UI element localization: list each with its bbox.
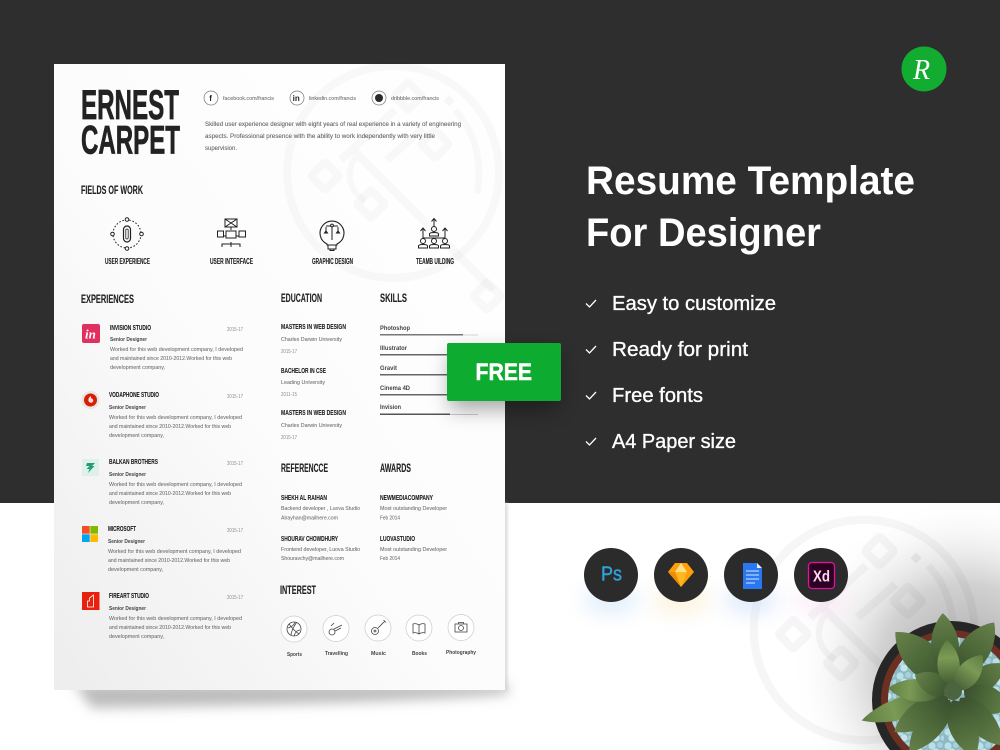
section: interest [280,583,477,658]
icon: sketch [653,548,709,614]
logo: green R badge: R [912,55,930,86]
section: education: 2015-17 [281,349,297,355]
summary paragraph: aspects. Professional presence with the ability to work independently with very little [205,133,435,140]
entry: microsoft [82,524,243,573]
name heading [81,81,180,162]
entry: fireart studio: Worked for this web development company, I developed [109,616,242,622]
summary paragraph: Skilled user experience designer with eight years of real experience in a variety of engineering [205,121,461,128]
software icons [583,548,849,614]
icon: photography [448,614,474,640]
background: white lower band [0,503,1000,750]
section: awards: Most outstanding Developer [380,506,447,512]
entry: vodaphone studio [82,390,243,439]
entry: balkan brothers: Worked for this web development company, I developed [109,482,242,488]
item: easy to customize: Easy to customize [612,293,776,315]
label: team building: TEAMB UILDING [416,257,454,266]
section: education: EDUCATION [281,291,322,305]
logo: balkan brothers [82,459,99,476]
section: education: Charles Darwin University [281,423,342,429]
icon: photoshop [583,548,639,614]
section: reference [281,461,360,562]
entry: microsoft: MICROSOFT [108,524,136,533]
icon: sports [281,616,307,642]
label: user interface: USER INTERFACE [210,257,253,266]
title: For Designer [586,211,821,255]
section: awards: LUOVASTUDIO [380,534,415,543]
entry: balkan brothers: 2015-17 [227,461,243,467]
section: education: MASTERS IN WEB DESIGN [281,408,346,417]
section: interest: Photography [446,650,477,656]
entry: fireart studio [82,591,243,640]
section: education: MASTERS IN WEB DESIGN [281,322,346,331]
entry: microsoft: Worked for this web development company, I developed [108,549,241,555]
section: reference: REFERENCCE [281,461,328,475]
logo: green R badge [902,46,946,92]
heading: fields of work: FIELDS OF WORK [81,185,143,197]
section: interest: Music [371,651,386,657]
social links [204,91,439,105]
badge: free [447,343,561,410]
facebook link: facebook.com/francis [223,96,274,102]
icon: google docs [723,548,779,614]
logo: fireart [82,592,100,610]
section: education: Charles Darwin University [281,337,342,343]
entry: microsoft: Senior Designer [108,539,146,545]
section: education: Leading University [281,380,325,386]
plant soft shadow [760,503,1000,750]
entry: balkan brothers [82,457,243,506]
icon: facebook [204,91,218,105]
icon: linkedin [290,91,304,105]
plant in pot [858,612,1000,750]
background: dark top band [0,0,1000,503]
section: reference: Backend developer , Luova Studio [281,506,360,512]
entry: vodaphone studio: Worked for this web development company, I developed [109,415,242,421]
section: awards: Feb 2014 [380,516,401,522]
entry: invision studio: development company, [110,365,165,371]
entry: balkan brothers: BALKAN BROTHERS [109,457,158,466]
summary paragraph [205,121,461,152]
paper drop shadow [74,503,508,708]
logo: vodafone [82,391,100,409]
title: Resume Template [586,159,915,203]
icon: adobe xd: Xd [813,568,830,586]
feature checklist [586,293,776,453]
skill bar: gravit: Gravit [380,366,397,372]
section: interest: Sports [287,652,302,658]
section: awards: NEWMEDIACOMPANY [380,493,433,502]
entry: balkan brothers: Senior Designer [109,472,147,478]
section: awards: Feb 2014 [380,556,401,562]
section: interest: Travelling [325,651,348,657]
leaves [858,612,1000,750]
linkedin link: linkedin.com/francis [309,96,356,102]
logo: invision [82,324,100,343]
skill bar: cinema 4d: Cinema 4D [380,386,411,392]
section: education: 2011-15 [281,392,297,398]
section: reference: SHOURAV CHOWDHURY [281,534,338,543]
icon: graphic design [320,221,344,250]
icon: books [406,615,432,641]
dribbble link: dribbble.com/francis [391,96,439,102]
entry: microsoft: and maintained since 2010-2012.Worked for this web [108,558,230,564]
entry: microsoft: development company, [108,567,163,573]
icon: photoshop: Ps [601,564,622,586]
label: user experience: USER EXPERIENCE [105,257,150,266]
section: education: BACHELOR IN CSE [281,366,326,375]
icon: team building [418,218,450,248]
section: skills: SKILLS [380,291,407,305]
section: skills [380,291,478,415]
section: reference: Shouravchy@mailhere.com [281,556,344,562]
name heading: ERNEST [81,81,179,128]
entry: invision studio: Worked for this web development company, I developed [110,347,243,353]
entry: fireart studio: Senior Designer [109,606,147,612]
entry: balkan brothers: development company, [109,500,164,506]
panel: resume paper [54,64,505,690]
skill bar: illustrator: Illustrator [380,346,408,352]
section: reference: SHEKH AL RAIHAN [281,493,327,502]
logo: invision: in [85,326,96,342]
label: graphic design: GRAPHIC DESIGN [312,257,353,266]
section: reference: Alrayhan@mailhere.com [281,516,338,522]
summary paragraph: supervision. [205,145,237,152]
watermark: lower logo mark [754,520,976,750]
entry: balkan brothers: and maintained since 2010-2012.Worked for this web [109,491,231,497]
item: ready for print: Ready for print [612,339,748,361]
entry: fireart studio: and maintained since 2010-2012.Worked for this web [109,625,231,631]
watermark: paper logo mark [287,66,501,310]
name heading: CARPET [81,118,180,162]
item: free fonts: Free fonts [612,385,703,407]
section: education: 2015-17 [281,435,297,441]
icon: travelling [323,616,349,642]
title [586,159,915,255]
badge: free: FREE [476,359,532,386]
entry: invision studio: INVISION STUDIO [110,323,151,332]
entry: fireart studio: development company, [109,634,164,640]
entry: vodaphone studio: VODAPHONE STUDIO [109,390,159,399]
icon: facebook: f [209,94,212,103]
section: awards: Most outstanding Developer [380,547,447,553]
entry: fireart studio: FIREART STUDIO [109,591,149,600]
section: awards [380,461,447,562]
section: interest: Books [412,651,427,657]
entry: microsoft: 2015-17 [227,528,243,534]
skill bar: photoshop: Photoshop [380,326,410,332]
entry: invision studio [82,323,243,371]
entry: vodaphone studio: Senior Designer [109,405,147,411]
heading: experiences: EXPERIENCES [81,292,134,306]
entry: fireart studio: 2015-17 [227,595,243,601]
icon: dribbble [372,91,386,105]
entry: vodaphone studio: and maintained since 2010-2012.Worked for this web [109,424,231,430]
entry: invision studio: and maintained since 2010-2012.Worked for this web [110,356,232,362]
pot [872,621,1000,750]
logo: microsoft [82,526,98,542]
section: interest: INTEREST [280,583,316,597]
entry: vodaphone studio: development company, [109,433,164,439]
skill bar: invision: Invision [380,405,401,411]
icon: linkedin: in [293,94,300,103]
item: a4 paper size: A4 Paper size [612,431,736,453]
icon: user interface [218,219,246,247]
entry: vodaphone studio: 2015-17 [227,394,243,400]
entry: invision studio: 2015-17 [227,327,243,333]
icon: music [365,615,391,641]
section: experiences [81,292,243,640]
section: reference: Frontend developer, Luova Studio [281,547,360,553]
section: awards: AWARDS [380,461,411,475]
icon: user experience [111,218,143,250]
icon: adobe xd [793,548,849,614]
entry: invision studio: Senior Designer [110,337,148,343]
section: education [281,291,346,441]
